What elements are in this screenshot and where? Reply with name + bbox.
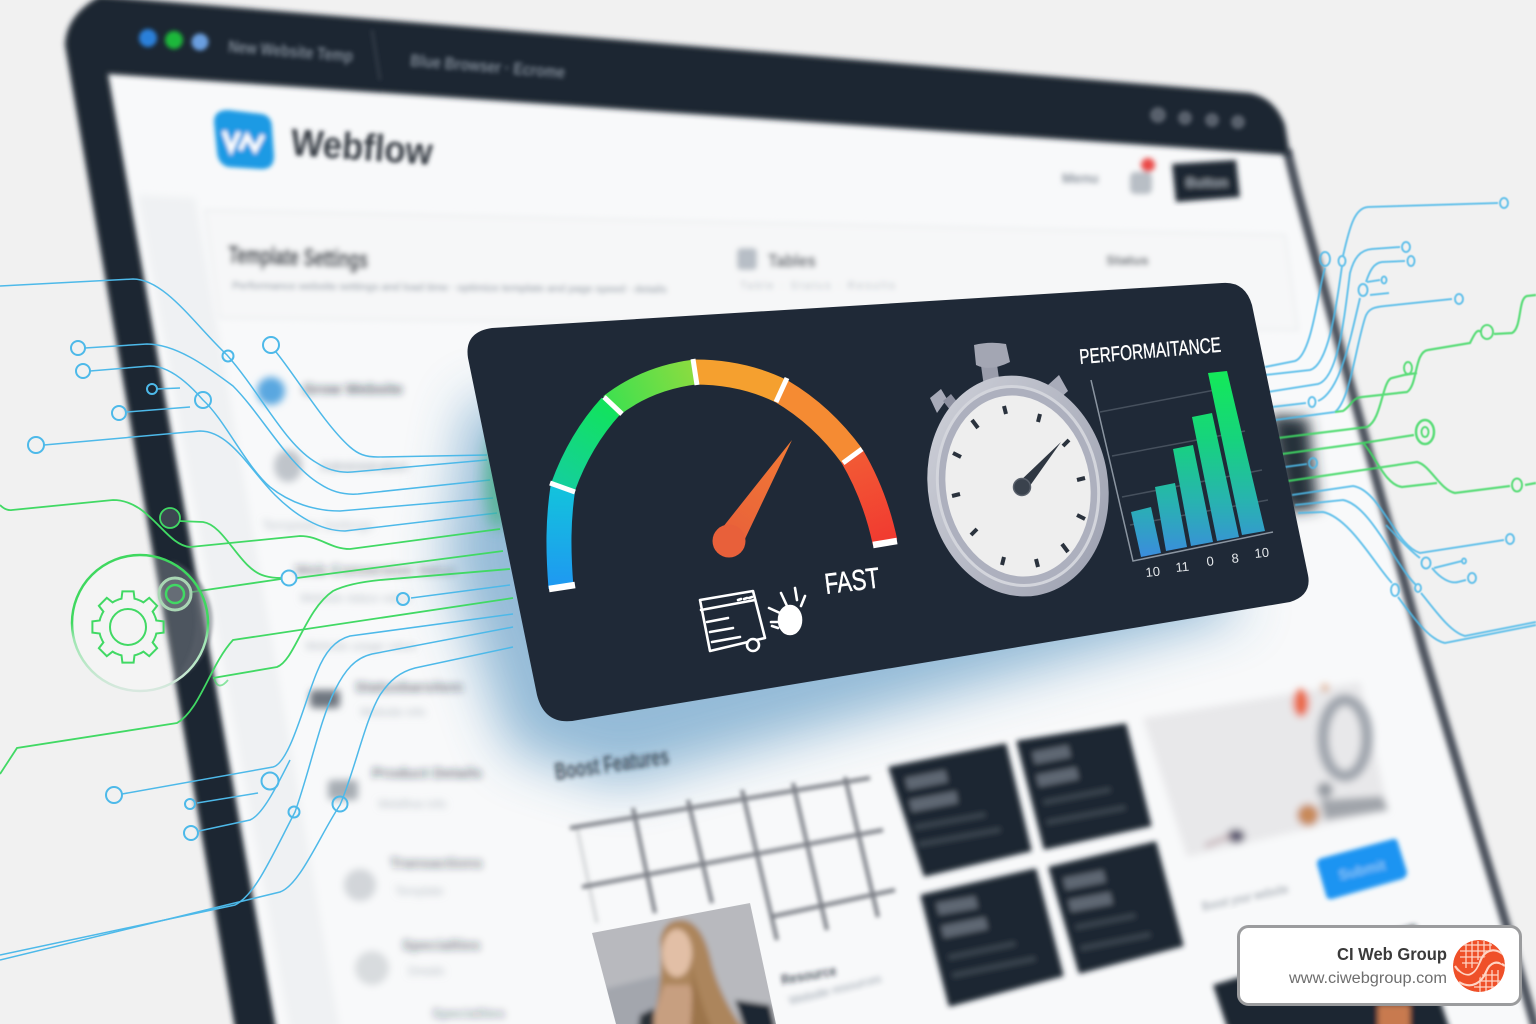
- blue trace 8: [0, 627, 513, 955]
- lens glass: [72, 555, 208, 691]
- tile 1: [890, 745, 1030, 875]
- window dot light blue: [192, 34, 208, 50]
- hair: [650, 920, 744, 1024]
- button label: Submit: [1337, 857, 1387, 883]
- green trace 1: [0, 500, 500, 549]
- right blue stub 3: [1285, 464, 1307, 467]
- webflow logo: [214, 110, 434, 174]
- right nodes blue: [1308, 198, 1514, 596]
- circuit lines left: [0, 279, 513, 960]
- orange hint: [1378, 1005, 1410, 1024]
- logo wordmark: Webflow: [289, 122, 434, 174]
- bar chart: [1091, 371, 1273, 580]
- chart labels: 8: [1231, 550, 1240, 566]
- green node dark: [160, 508, 180, 528]
- brand name: CI Web Group: [1337, 944, 1447, 964]
- tables icon: [737, 248, 757, 270]
- window dot blue: [139, 29, 157, 47]
- button shape: [1317, 839, 1407, 899]
- bottom right dark block: [1213, 925, 1450, 1024]
- needle: [712, 440, 792, 558]
- right blue trace 2: [1265, 203, 1498, 375]
- card subtext: Performance website settings and load time · optimize template and page speed · details: [232, 280, 667, 296]
- brand url: www.ciwebgroup.com: [1288, 970, 1447, 987]
- right blue trace 4: [1272, 261, 1405, 407]
- item: second icon: [274, 450, 302, 482]
- dark block behind card right: [1270, 415, 1318, 512]
- logo tile: [214, 110, 274, 169]
- logo net: [1460, 941, 1500, 992]
- photo of person: [592, 903, 776, 1024]
- item icon 3: [310, 690, 340, 708]
- right green trace 4: [1363, 443, 1437, 487]
- blue trace 5: [276, 352, 487, 457]
- right button: [1048, 375, 1068, 400]
- right nodes green: [1404, 325, 1522, 492]
- sidebar list: [257, 377, 505, 1021]
- face: [662, 929, 692, 977]
- blue stub 1: [156, 388, 180, 389]
- device base: [1320, 796, 1388, 820]
- bar 4: [1192, 413, 1239, 541]
- small text near button: Boost your website: [1201, 881, 1290, 914]
- item sub 3: Website info: [360, 705, 426, 719]
- right blue trace 1: [1265, 268, 1325, 367]
- right blue trace 8: [1386, 525, 1466, 582]
- tile 2: [1018, 725, 1150, 848]
- crown stem: [981, 361, 1000, 385]
- blue trace 6: [122, 614, 513, 794]
- gauge left cap: [549, 585, 575, 589]
- profile sub text: Website resources: [787, 971, 883, 1008]
- photo backdrop shade: [606, 976, 661, 1024]
- right blue trace 5: [1275, 299, 1452, 420]
- blue trace 2: [85, 344, 490, 494]
- device ring: [1323, 700, 1367, 776]
- orange accent: [1293, 689, 1309, 717]
- toolbar separator: [372, 30, 380, 80]
- table grid: [570, 777, 895, 940]
- brand logo: [1453, 940, 1505, 992]
- tile 4: [1050, 843, 1182, 972]
- right green trace 5: [1288, 462, 1536, 493]
- chart axes: [1091, 380, 1273, 561]
- green glow on card edge: [484, 430, 512, 530]
- item label 8: Specialties: [402, 937, 480, 954]
- item icon 6: [355, 951, 389, 985]
- left button: [930, 389, 947, 413]
- item label 5: Statusbarsitem: [355, 679, 463, 696]
- card heading: Template Settings: [228, 241, 369, 274]
- bar 5: [1208, 371, 1265, 535]
- window dot green: [165, 31, 183, 49]
- item icon 5: [344, 869, 376, 901]
- pink streak: [1205, 836, 1230, 846]
- browser window frame: [65, 0, 1290, 1024]
- right blue trace 9: [1298, 512, 1536, 643]
- device stand: [1317, 782, 1333, 798]
- notification dot: [1141, 158, 1155, 172]
- item label 7: Transactions: [390, 855, 483, 872]
- window bar: [701, 600, 755, 610]
- minute hand: [1018, 442, 1061, 490]
- item label 9: Specialties: [432, 1005, 505, 1021]
- stopwatch: [910, 343, 1126, 611]
- chart labels: [1145, 545, 1270, 580]
- dark block: [1213, 925, 1450, 1024]
- bar 2: [1155, 483, 1187, 551]
- brand badge: [1238, 926, 1520, 1004]
- right green trace 2: [1278, 373, 1417, 438]
- logo band outlines: [1455, 950, 1505, 985]
- chest: [651, 982, 694, 1024]
- tables subtext: Table · Status · Results: [740, 280, 896, 292]
- toolbar: [139, 29, 1245, 129]
- browser speed icon: [700, 588, 805, 651]
- right blue trace 7: [1295, 500, 1536, 636]
- status label: Status: [1106, 252, 1149, 268]
- lower page content: [553, 743, 895, 940]
- blue trace 3: [90, 366, 493, 511]
- header actions: [1062, 158, 1240, 202]
- blue stub 3: [411, 585, 510, 598]
- card background: [205, 210, 1298, 330]
- right green trace 1: [1335, 295, 1536, 412]
- menu label: Menu: [1062, 170, 1099, 186]
- item sub 5: Template: [395, 884, 444, 898]
- gauge deep orange segment: [781, 391, 852, 456]
- chart labels: 10: [1145, 564, 1161, 580]
- target node: [159, 578, 191, 610]
- window outline: [700, 591, 765, 651]
- needle hub: [712, 524, 746, 558]
- purple accent: [1227, 829, 1245, 843]
- logo band: [1456, 957, 1504, 979]
- fast label: FAST: [823, 562, 882, 601]
- circuit lines right: [1265, 198, 1536, 643]
- item label: Grow Website: [303, 381, 403, 398]
- clothing left: [638, 1008, 654, 1024]
- section heading: Boost Features: [553, 743, 671, 786]
- right blue trace 6: [1292, 486, 1504, 553]
- blue trace 9: [0, 647, 513, 960]
- item sub 2: Website usage value: [305, 639, 417, 653]
- performance heading: PERFORMAITANCE: [1078, 334, 1222, 369]
- right blue stub 2: [1370, 293, 1389, 295]
- green arc: [214, 678, 228, 686]
- green trace to gear: [192, 579, 281, 592]
- bar 3: [1173, 445, 1213, 546]
- settings card: [205, 210, 1298, 330]
- blue trace 4: [44, 431, 497, 531]
- hair front: [688, 981, 710, 1024]
- hero image top right: [1143, 682, 1388, 857]
- gauge lime segment: [611, 372, 695, 406]
- toolbar right icons: [1150, 107, 1245, 129]
- blue call to action: [1317, 839, 1407, 899]
- button label: Button: [1186, 175, 1228, 190]
- small cog: [747, 639, 759, 651]
- toolbar path: Blue Browser · Ecrome: [410, 51, 566, 82]
- badge box: [1238, 926, 1520, 1004]
- item label 6: Product Details: [372, 765, 482, 782]
- green trace 2: [178, 521, 503, 578]
- item label 2: Administration: [320, 458, 409, 474]
- sidebar shade: [138, 195, 340, 1024]
- item label 4: Web Conversion Value: [295, 562, 456, 579]
- gauge ticks: [550, 359, 862, 492]
- item: highlighted: [257, 377, 285, 405]
- left nodes: [28, 337, 409, 840]
- gauge right cap: [873, 541, 897, 545]
- item sub 6: Details: [408, 964, 445, 978]
- chart grid: [1100, 390, 1268, 525]
- gear lens: [72, 555, 213, 691]
- orange accent small: [1321, 684, 1329, 692]
- tile 3: [922, 870, 1062, 1005]
- image background: [1143, 682, 1388, 857]
- dial: [931, 384, 1105, 588]
- item icon 4: [328, 780, 358, 800]
- chart labels: 10: [1254, 545, 1270, 561]
- speed gauge: [549, 359, 897, 589]
- clothing right: [735, 1000, 776, 1024]
- chart labels: 0: [1206, 553, 1215, 569]
- dark button: [1172, 160, 1240, 202]
- gauge blue segment: [559, 487, 563, 588]
- item sub 4: Webflow info: [378, 797, 447, 811]
- item sub: Website status value: [300, 591, 411, 605]
- blue trace 7: [199, 760, 290, 831]
- right target node: [1416, 420, 1434, 444]
- gauge orange segment: [695, 372, 781, 391]
- lens shade: [172, 560, 213, 682]
- blue trace 1: [0, 279, 487, 472]
- main card shadow: [445, 400, 1250, 785]
- green trace 4: [0, 598, 513, 774]
- crown: [974, 343, 1010, 368]
- burst dot: [779, 606, 801, 634]
- right blue trace 3: [1268, 247, 1400, 392]
- dark feature tiles: [890, 725, 1182, 1005]
- profile name: Resource: [780, 962, 838, 989]
- window controls: [738, 597, 752, 600]
- tables label: Tables: [768, 251, 816, 271]
- green trace 3: [213, 569, 510, 678]
- window text lines: [707, 618, 740, 642]
- item label 3: Template Settings: [262, 517, 373, 533]
- main performance card: [468, 283, 1309, 721]
- photo background: [592, 903, 776, 1024]
- light rays: [769, 588, 805, 628]
- green node: [282, 570, 296, 586]
- right frame edge: [1287, 150, 1536, 1024]
- orange accent low: [1297, 804, 1319, 826]
- hand hub: [1014, 478, 1030, 496]
- card body: [468, 283, 1309, 721]
- bell: [1130, 172, 1152, 194]
- right blue stub 1: [1367, 280, 1380, 282]
- hour ticks: [952, 406, 1085, 567]
- bar 1: [1131, 507, 1161, 557]
- needle pointer: [719, 440, 792, 541]
- gauge green segment: [563, 406, 611, 487]
- blue stub 2: [127, 407, 190, 412]
- inner ring: [922, 374, 1114, 598]
- lens ring: [72, 555, 208, 691]
- gear icon: [92, 591, 164, 663]
- tile text: [905, 745, 1151, 978]
- chart labels: 11: [1175, 559, 1190, 575]
- right blue stub 4: [1434, 561, 1462, 568]
- left button stem: [943, 394, 958, 410]
- right green trace 3: [1282, 435, 1414, 454]
- blue stub 4: [197, 793, 258, 803]
- outer case: [910, 361, 1126, 611]
- toolbar title: New Website Temp: [228, 37, 354, 66]
- logo mark: [224, 131, 263, 150]
- gauge red segment: [852, 456, 885, 542]
